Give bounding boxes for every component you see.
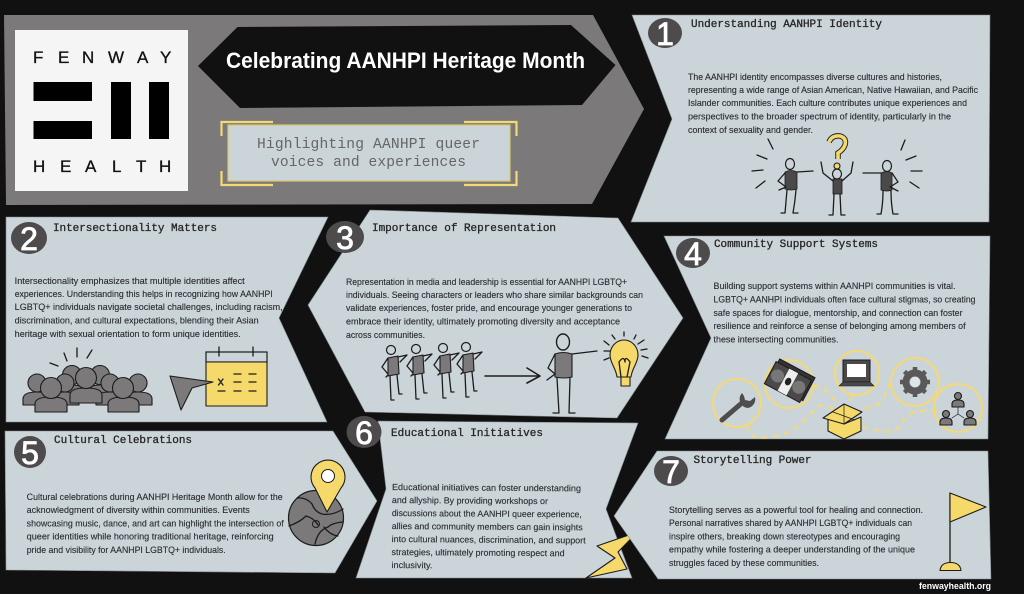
icon: presenter [547,334,597,413]
text block 3: individuals. Seeing characters or leaders who share similar backgrounds can [346,290,643,300]
subtitle box [222,122,516,185]
text block 2: experiences. Understanding this helps in recognizing how AANHPI [15,289,273,299]
heading 5: Cultural Celebrations [54,435,192,447]
icon: crowd [23,348,152,412]
text block 6: strategies, ultimately promoting respect and [392,547,565,558]
panel 2: Intersectionality Matters [6,217,328,422]
number 7: 7 [662,454,680,490]
panel 1: Understanding AANHPI Identity [631,15,990,222]
logo: Fenway Health: HEALTH [33,157,171,176]
text block 1: context of sexuality and gender. [688,125,813,135]
text block 2: Intersectionality emphasizes that multiple identities affect [15,276,245,286]
text block 4: LGBTQ+ AANHPI individuals often face cultural stigmas, so creating [714,294,976,304]
number 7 [654,454,688,490]
text block 1: The AANHPI identity encompasses diverse cultures and histories, [688,72,942,82]
number 3: 3 [336,220,354,256]
logo: Fenway Health [15,30,188,191]
number 3 [326,220,364,256]
panel 5: Cultural Celebrations [5,431,377,573]
text block 2 [15,276,283,339]
icon: gear [891,358,939,406]
title [198,25,616,108]
heading 3: Importance of Representation [372,223,556,235]
panel 4: Community Support Systems [664,236,990,439]
number 1 [648,16,682,52]
footer url: fenwayhealth.org [919,581,991,591]
text block 4: these intersecting communities. [714,334,838,344]
text block 4: safe spaces for dialogue, mentorship, and connection can foster [714,308,963,318]
subtitle box: Highlighting AANHPI queer [257,137,480,153]
number 6 [346,415,382,451]
arrow [485,368,540,383]
text block 2: discrimination, and cultural expectations, blending their Asian [15,316,259,326]
text block 3: validate experiences, foster pride, and encourage younger generations to [346,303,632,313]
panel: header banner [4,15,644,205]
text block 2: LGBTQ+ individuals navigate societal challenges, including racism, [15,302,283,312]
text block 3: embrace their identity, ultimately promoting diversity and acceptance [346,316,620,326]
heading 4: Community Support Systems [714,239,878,251]
text block 3 [346,277,643,340]
text block 6: into cultural nuances, discrimination, and support [392,534,586,545]
number 5: 5 [21,435,39,471]
text block 5: acknowledgment of diversity within communities. Events [27,505,250,515]
text block 7: Personal narratives shared by AANHPI LGBTQ+ individuals can [669,518,912,528]
icon: lightning bolt [586,532,638,578]
subtitle box: voices and experiences [271,155,466,171]
dashed connectors [747,382,937,438]
text block 6: and allyship. By providing workshops or [392,495,548,506]
icon: wrench [713,379,761,427]
number 4 [676,236,710,272]
number 5 [14,435,46,471]
text block 7: inspire others, breaking down stereotypes and encouraging [669,532,900,542]
title: Celebrating AANHPI Heritage Month [226,48,585,73]
icon: light bulb [604,332,648,386]
number 6: 6 [355,415,373,451]
icon: three people and question mark [752,136,922,215]
text block 5: Cultural celebrations during AANHPI Heritage Month allow for the [27,492,283,502]
text block 6: allies and community members can gain insights [392,521,583,532]
text block 6: discussions about the AANHPI queer experience, [392,508,582,519]
panel 6: Educational Initiatives [346,415,638,578]
icon: calendar and cursor [170,347,267,410]
text block 1: perspectives to the broader spectrum of identity, particularly in the [688,112,951,122]
text block 6: Educational initiatives can foster understanding [392,482,581,493]
panel 3: Importance of Representation [308,210,683,418]
heading 2: Intersectionality Matters [53,223,217,235]
number 4: 4 [684,236,702,272]
heading 6: Educational Initiatives [391,428,543,440]
icon: money [764,358,815,408]
text block 2: heritage with sexual orientation to form unique identities. [15,329,241,339]
text block 5: showcasing music, dance, and art can highlight the intersection of [27,518,284,528]
heading 7: Storytelling Power [694,455,812,467]
text block 6: inclusivity. [391,560,433,570]
logo: Fenway Health: FENWAY [33,48,171,67]
text block 4 [714,281,976,344]
text block 5: pride and visibility for AANHPI LGBTQ+ individuals. [27,545,226,555]
text block 1 [688,72,979,135]
icon: laptop [835,351,879,395]
icon: flag [940,493,986,570]
heading 1: Understanding AANHPI Identity [691,19,882,31]
number 2 [11,221,47,257]
icon: four small figures [382,342,482,400]
text block 3: across communities. [346,330,425,340]
panel 7: Storytelling Power [614,451,991,579]
text block 7: empathy while fostering a deeper understanding of the unique [669,544,915,554]
icon: open box [823,404,862,439]
number 2: 2 [20,221,38,257]
icon: globe with map pin [288,460,345,546]
text block 1: Islander communities. Each culture contributes unique experiences and [688,98,967,108]
text block 7 [669,505,923,568]
text block 5 [27,492,284,555]
text block 7: Storytelling serves as a powerful tool for healing and connection. [669,505,923,515]
text block 1: representing a wide range of Asian American, Native Hawaiian, and Pacific [688,85,979,95]
text block 4: resilience and reinforce a sense of belonging among members of [714,321,966,331]
text block 4: Building support systems within AANHPI communities is vital. [714,281,956,291]
text block 3: Representation in media and leadership is essential for AANHPI LGBTQ+ [346,277,627,287]
text block 6 [391,482,587,571]
number 1: 1 [656,16,674,52]
icon: network of people [934,384,982,432]
text block 5: queer identities while honoring traditional heritage, reinforcing [27,532,274,542]
text block 7: struggles faced by these communities. [669,558,819,568]
